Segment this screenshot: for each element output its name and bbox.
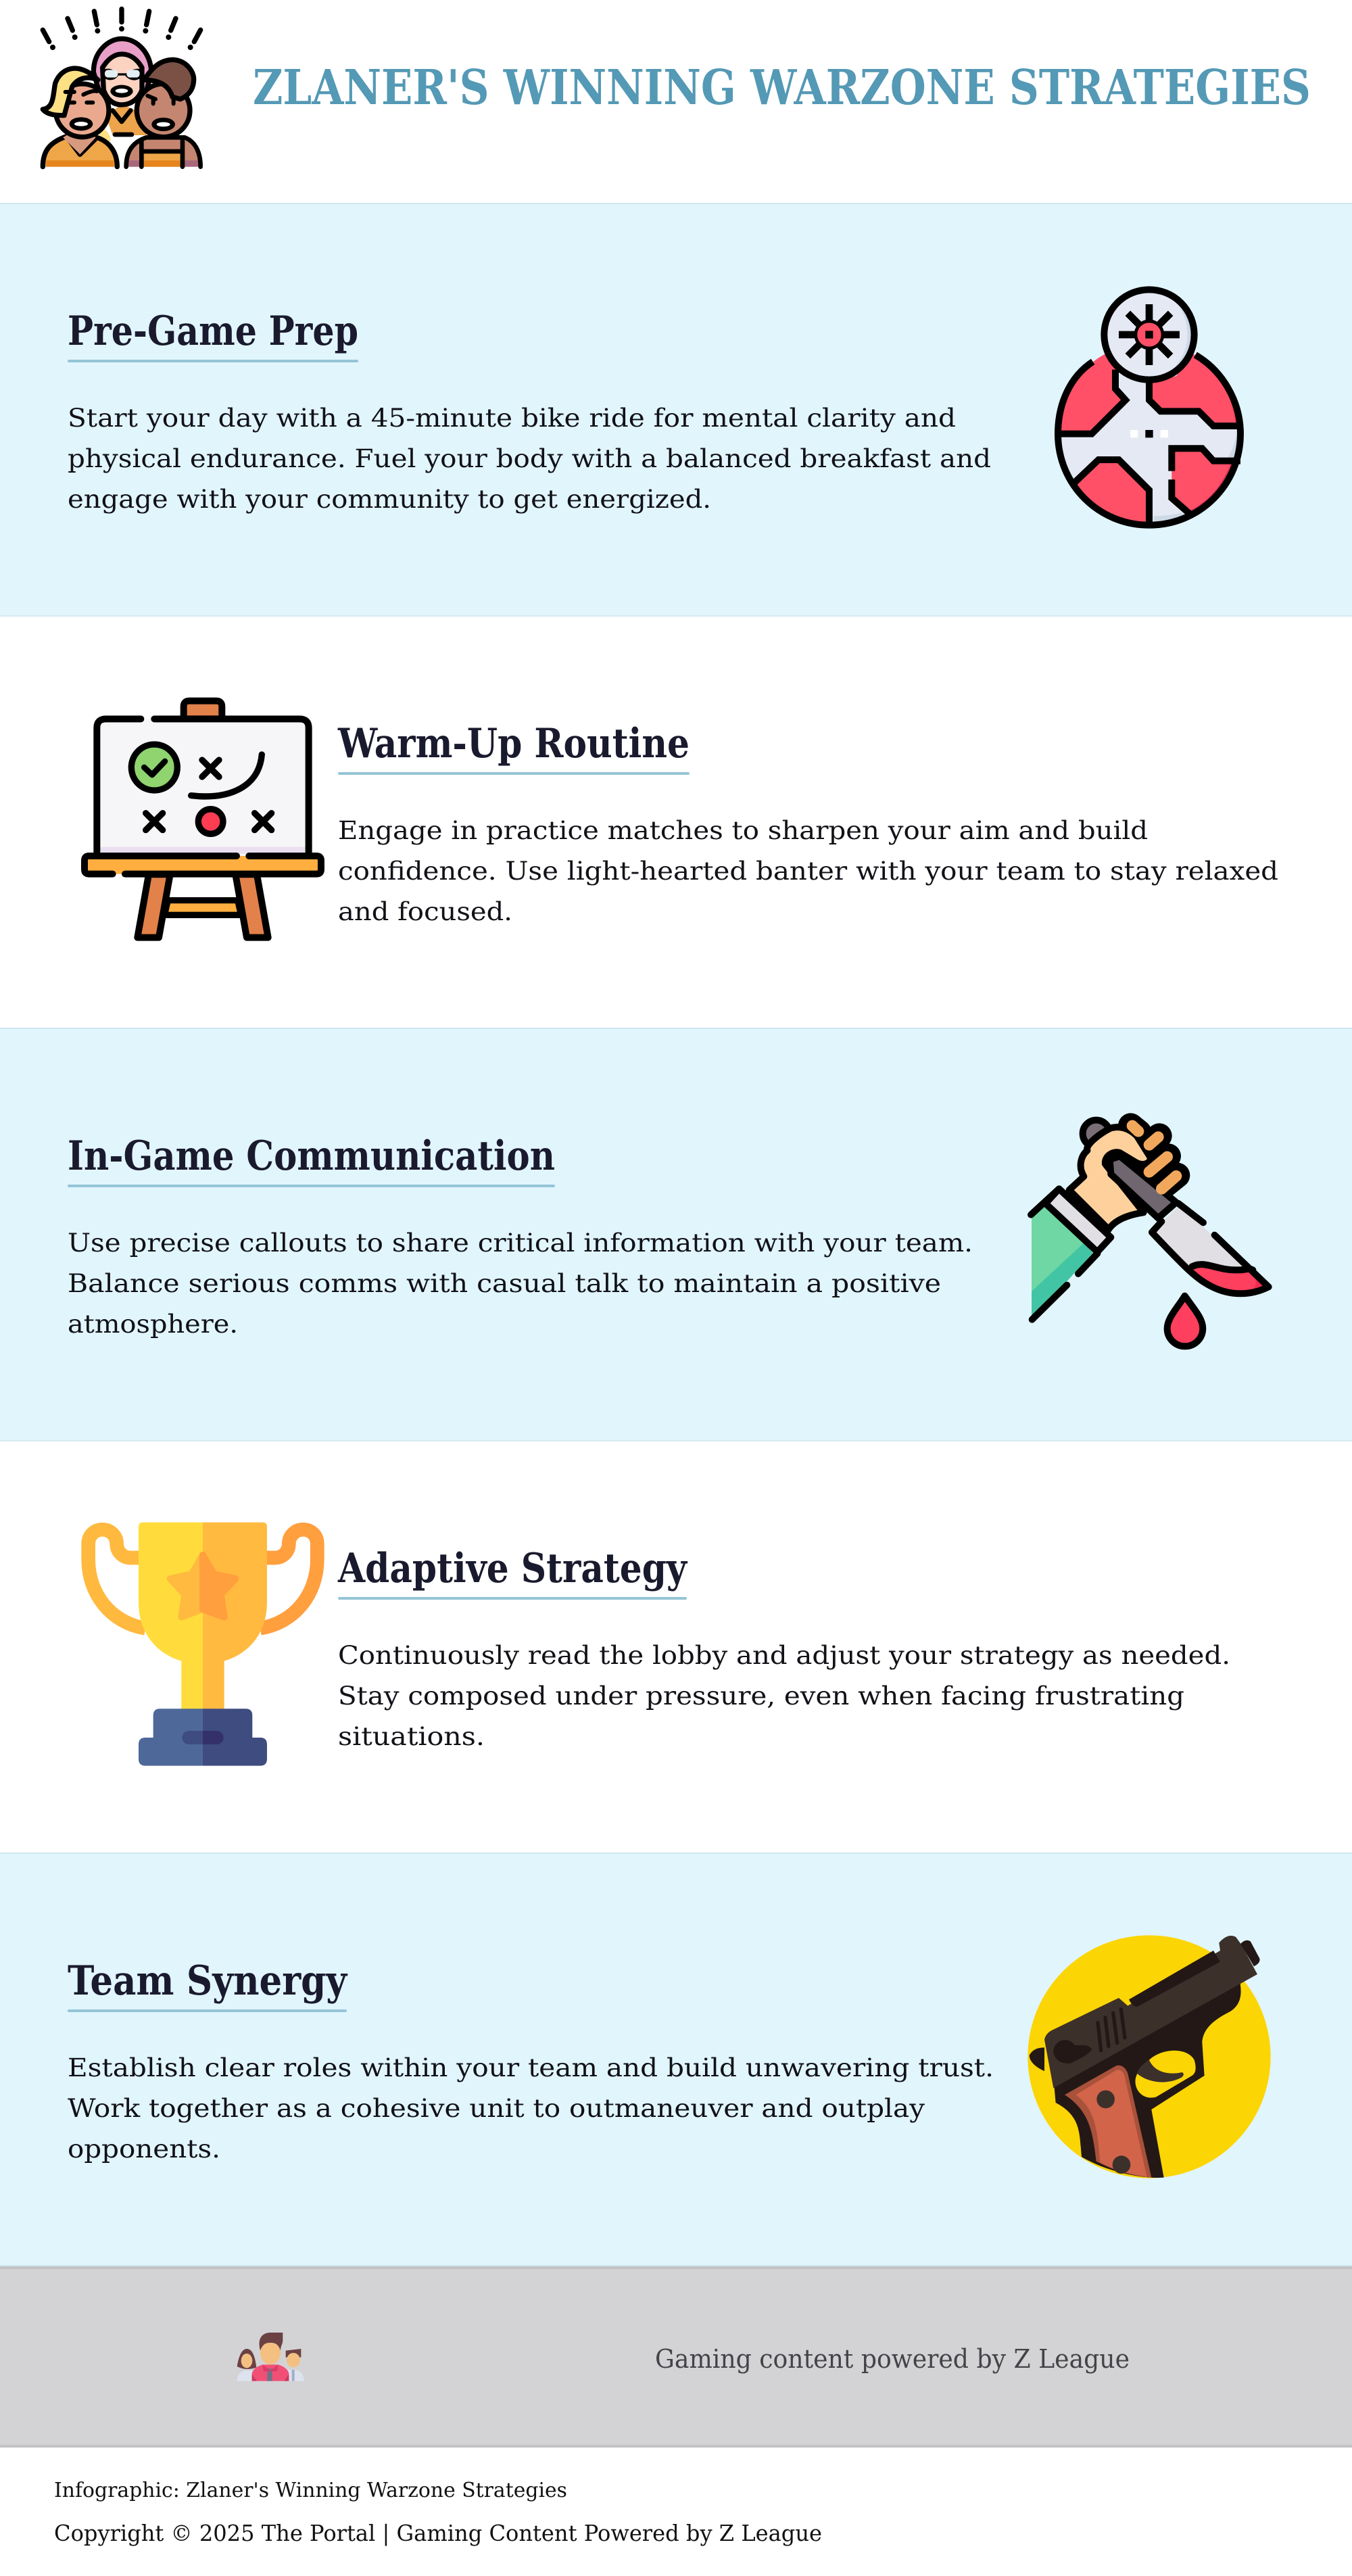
text block: team synergy: Establish clear roles within your team and build unwavering trust. xyxy=(68,2053,994,2082)
panel: warm-up routine xyxy=(0,615,1352,1028)
heading: adaptive strategy: Adaptive Strategy xyxy=(337,1545,688,1592)
text block: team synergy xyxy=(68,2053,994,2164)
text block: adaptive strategy: Stay composed under pressure, even when facing frustrating xyxy=(338,1681,1184,1711)
icon: team of three people xyxy=(237,2333,304,2381)
copyright line: Copyright © 2025 The Portal | Gaming Content Powered by Z League xyxy=(54,2520,822,2546)
text block: warm-up routine xyxy=(338,816,1278,926)
text block: adaptive strategy xyxy=(338,1641,1230,1751)
panel: adaptive strategy xyxy=(0,1440,1352,1853)
sponsor text: Gaming content powered by Z League xyxy=(655,2344,1130,2374)
heading: team synergy: Team Synergy xyxy=(68,1957,348,2005)
text block: pre-game prep: Start your day with a 45-minute bike ride for mental clarity and xyxy=(68,404,956,433)
text block: warm-up routine: Engage in practice matches to sharpen your aim and build xyxy=(338,816,1148,845)
text block: pre-game prep: physical endurance. Fuel your body with a balanced breakfast and xyxy=(68,444,991,473)
text block: adaptive strategy: situations. xyxy=(338,1722,485,1751)
text block: pre-game prep xyxy=(68,404,991,514)
panel: sponsor banner xyxy=(0,2265,1352,2448)
footer credits xyxy=(54,2479,822,2546)
icon: shocked group of three people xyxy=(43,9,201,167)
icon: tactics board on easel xyxy=(84,701,321,938)
text block: pre-game prep: engage with your community to get energized. xyxy=(68,485,711,514)
heading: in-game communication: In-Game Communication xyxy=(68,1132,555,1180)
icon: trophy xyxy=(89,1523,317,1766)
panel: pre-game prep xyxy=(0,203,1352,615)
text block: in-game communication: Use precise callouts to share critical information with your team. xyxy=(68,1229,973,1258)
text block: team synergy: Work together as a cohesive unit to outmaneuver and outplay xyxy=(68,2094,925,2123)
icon: globe with virus marker xyxy=(1055,289,1249,527)
text block: team synergy: opponents. xyxy=(68,2134,220,2164)
text block: warm-up routine: confidence. Use light-hearted banter with your team to stay relaxed xyxy=(338,857,1278,886)
text block: warm-up routine: and focused. xyxy=(338,897,512,926)
panel: team synergy xyxy=(0,1853,1352,2265)
panel: in-game communication xyxy=(0,1028,1352,1440)
text block: in-game communication: Balance serious comms with casual talk to maintain a positive xyxy=(68,1269,941,1298)
text block: adaptive strategy: Continuously read the lobby and adjust your strategy as needed. xyxy=(338,1641,1230,1670)
heading: warm-up routine: Warm-Up Routine xyxy=(337,720,690,767)
header xyxy=(43,9,1311,167)
icon: pistol on yellow circle xyxy=(1028,1935,1271,2178)
text block: in-game communication xyxy=(68,1229,973,1339)
heading: pre-game prep: Pre-Game Prep xyxy=(68,308,358,355)
icon: hand holding bloody knife xyxy=(1031,1120,1269,1346)
infographic caption: Infographic: Zlaner's Winning Warzone Strategies xyxy=(54,2479,567,2502)
text block: in-game communication: atmosphere. xyxy=(68,1310,238,1339)
